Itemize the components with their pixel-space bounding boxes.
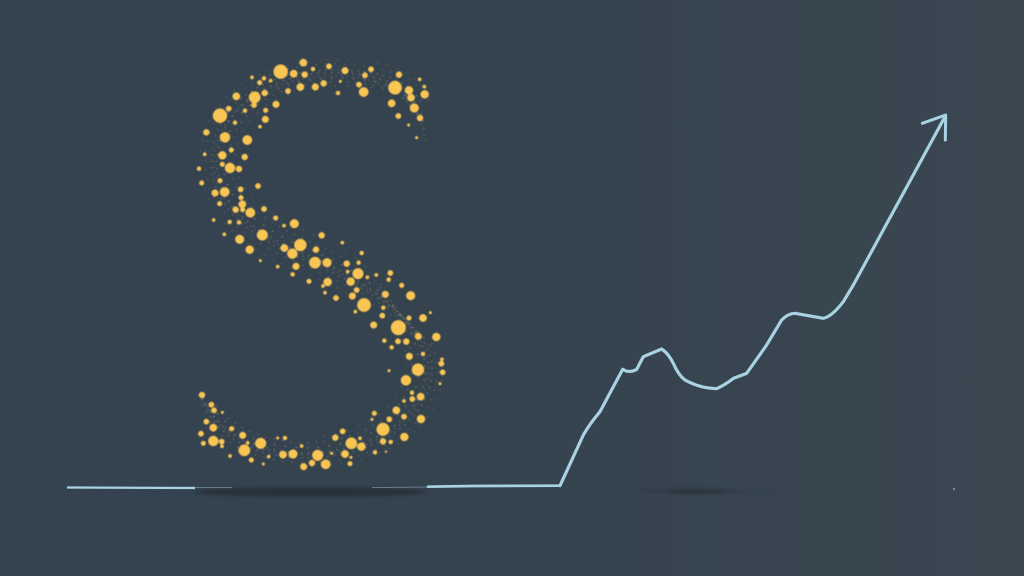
shadow beneath chart line: [666, 489, 726, 494]
arrow head: [922, 115, 946, 140]
baseline left segment: [67, 486, 195, 489]
baseline thin middle segment: [195, 486, 428, 488]
stipple of small dots: [198, 60, 443, 467]
letter S made of golden dots: [197, 59, 445, 470]
wide faint shadow beneath chart line: [610, 490, 780, 492]
upper dots: [197, 59, 429, 262]
rising line with arrow: [428, 115, 946, 487]
lower dots: [198, 257, 445, 470]
baseline connection: [428, 486, 560, 487]
growth curve: [560, 117, 945, 486]
tiny end mark on the ground: [953, 488, 955, 490]
shadow beneath S: [195, 487, 427, 497]
